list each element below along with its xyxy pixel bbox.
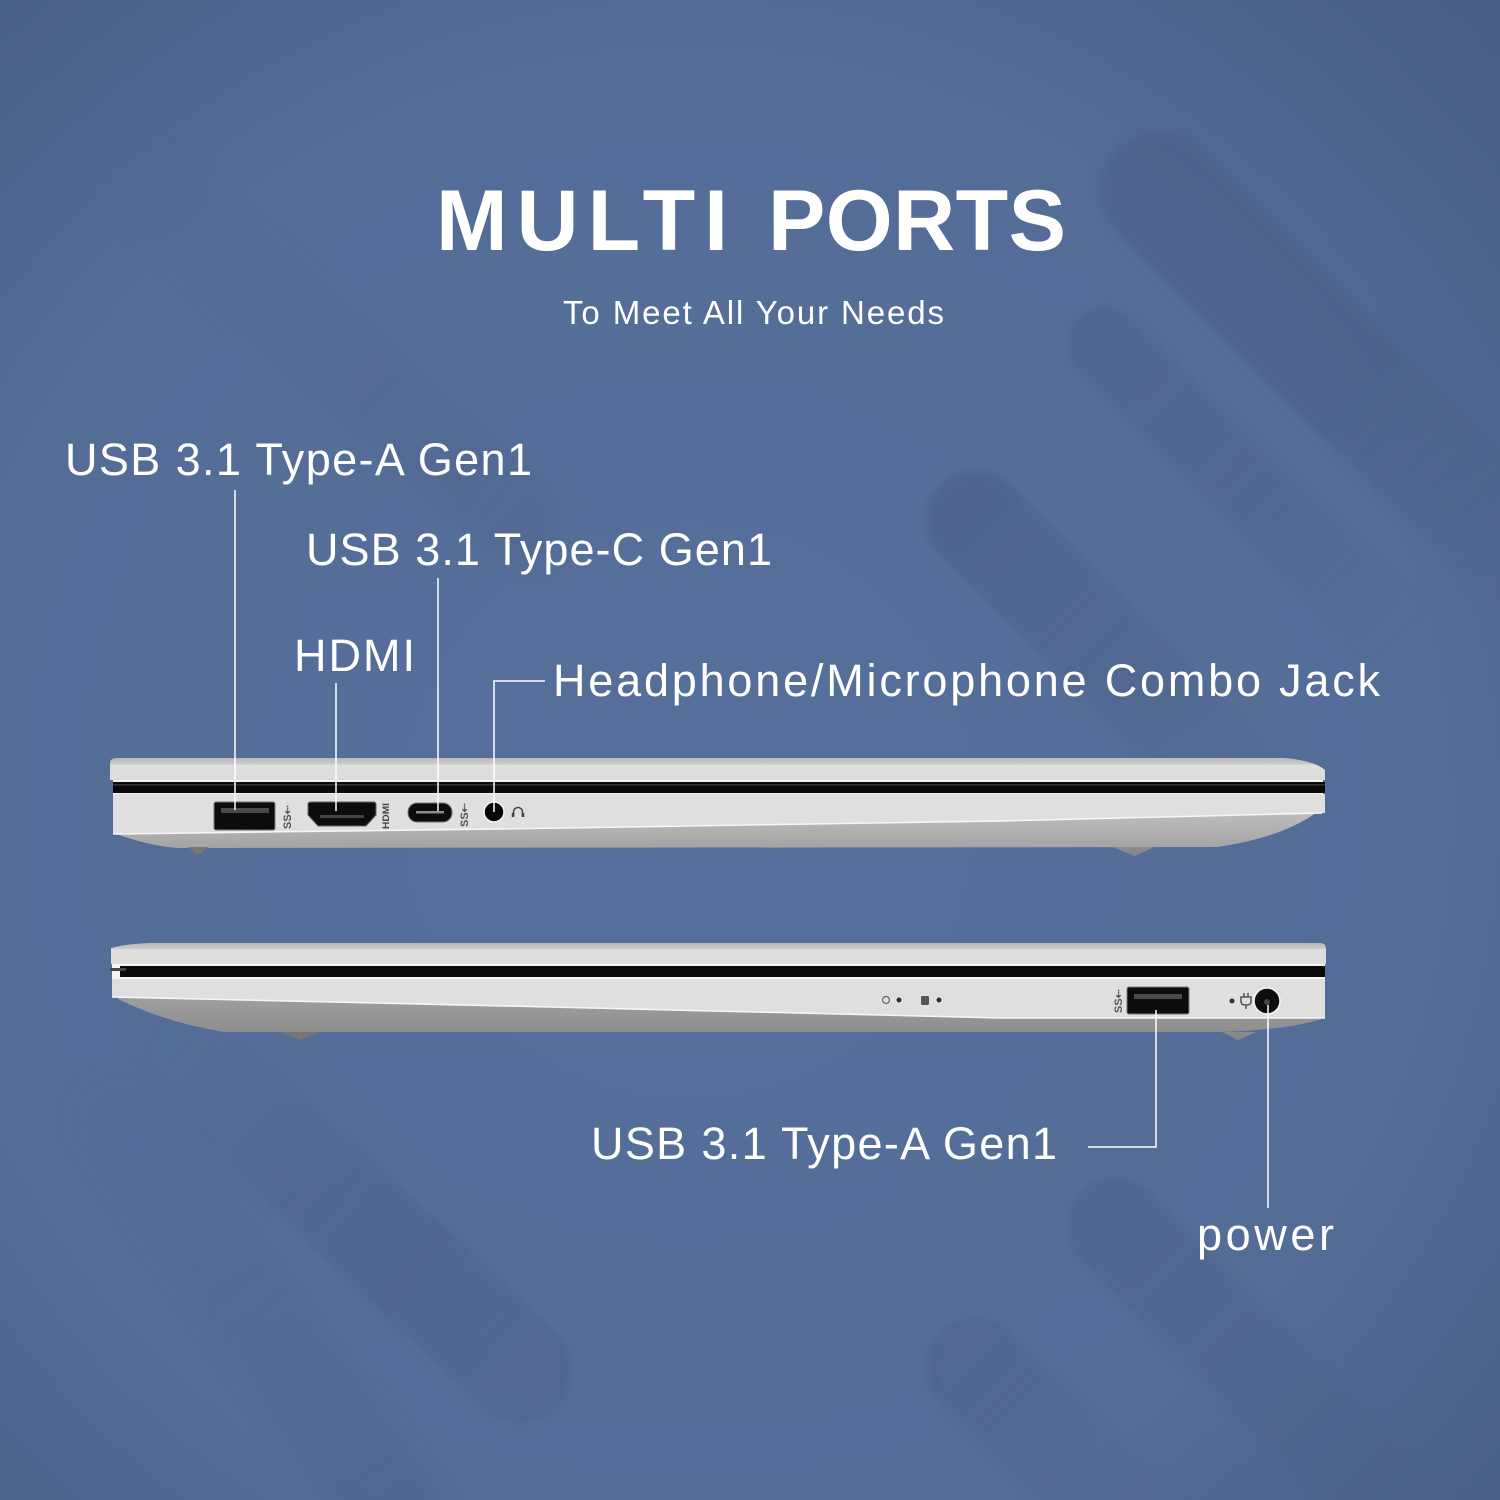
power jack <box>1254 988 1280 1014</box>
base top surface <box>113 794 1325 834</box>
label: USB-A, left side: USB 3.1 Type-A Gen1 <box>65 434 532 485</box>
base top surface <box>112 979 1325 1018</box>
label: headphone jack: Headphone/Microphone Combo Jack <box>553 655 1380 706</box>
base edge highlight <box>112 997 1325 1018</box>
USB-A port <box>1127 987 1189 1014</box>
leader lines <box>235 490 1268 1208</box>
SS icon: SS⇠ <box>1113 989 1125 1013</box>
lid, left side <box>110 758 1325 780</box>
laptop: right side view <box>110 943 1326 1040</box>
title <box>436 173 1066 269</box>
hinge gap <box>110 964 1325 979</box>
SS icon: SS⇠ <box>459 803 471 827</box>
label: USB-C: USB 3.1 Type-C Gen1 <box>306 524 772 575</box>
rubber foot left <box>188 847 209 855</box>
base underside <box>118 990 1325 1032</box>
label: power: power <box>1197 1209 1334 1260</box>
HDMI icon: HDMI <box>381 803 391 829</box>
base edge highlight <box>113 813 1322 834</box>
rubber foot right <box>1222 1032 1256 1040</box>
laptop: left side view <box>110 758 1325 856</box>
headphone icon <box>513 808 523 817</box>
subtitle: To Meet All Your Needs <box>563 294 944 331</box>
rubber foot right <box>1112 847 1154 856</box>
label: HDMI: HDMI <box>294 630 415 681</box>
USB-A port <box>214 802 275 830</box>
power and drive indicators <box>882 996 942 1005</box>
plug icon <box>1241 993 1251 1009</box>
title: PORTS <box>768 173 1066 269</box>
lid, right side <box>111 943 1326 964</box>
label: USB-A, right side: USB 3.1 Type-A Gen1 <box>591 1118 1057 1169</box>
HDMI port <box>308 802 376 826</box>
rubber foot left <box>280 1032 320 1040</box>
charge LED <box>1230 998 1234 1004</box>
base underside <box>116 813 1316 848</box>
SS icon: SS⇠ <box>282 805 294 829</box>
audio jack <box>484 802 504 822</box>
USB-C port <box>408 803 452 822</box>
title: MULTI <box>436 173 728 269</box>
hinge gap <box>113 780 1325 794</box>
